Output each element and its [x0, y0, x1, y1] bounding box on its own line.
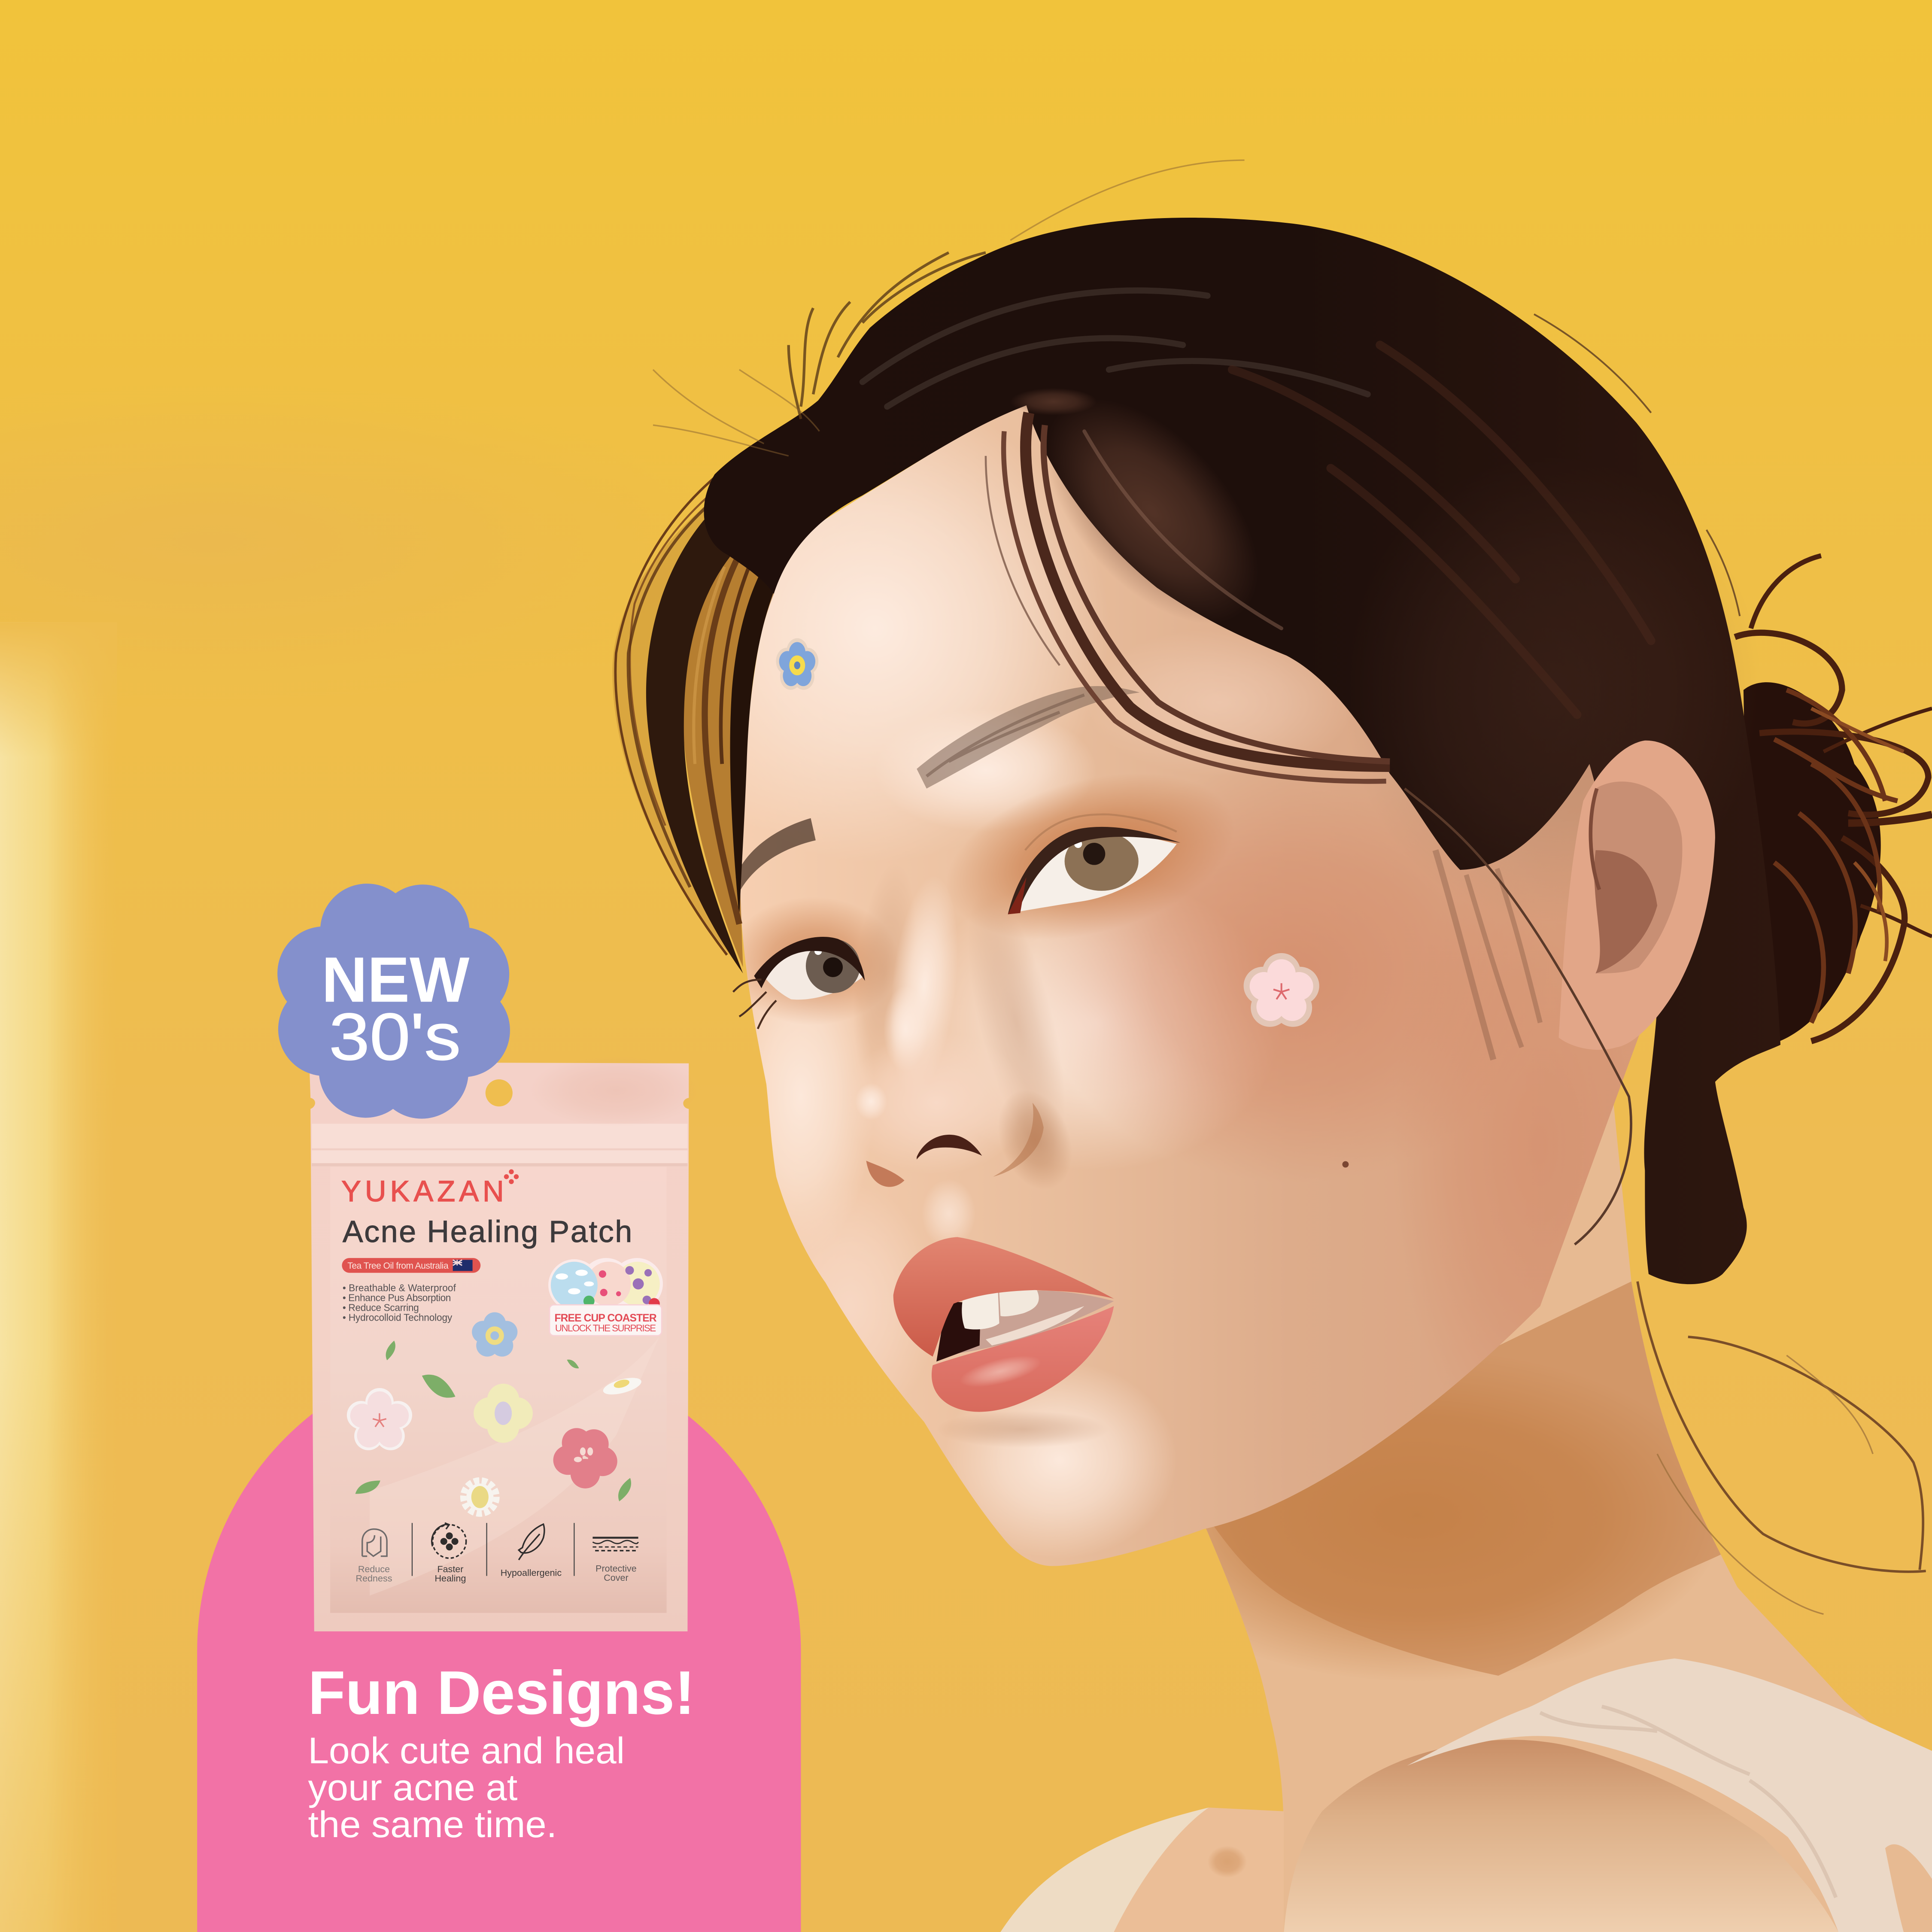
face	[740, 405, 1639, 1566]
zip seal band	[312, 1054, 702, 1166]
product name: Acne Healing Patch	[343, 1215, 632, 1249]
feature labels: Protective	[595, 1564, 637, 1574]
product pouch	[309, 1054, 702, 1631]
benefits list: • Reduce Scarring	[343, 1302, 419, 1313]
free cup coaster sticker	[548, 1258, 663, 1336]
patch: cherry blossom on cheek	[1244, 953, 1319, 1027]
tea tree pill: Tea Tree Oil from Australia	[347, 1261, 449, 1271]
feature labels: Healing	[434, 1574, 466, 1584]
clothing top straps	[1000, 1659, 1932, 1932]
feature labels: Reduce	[358, 1564, 390, 1574]
soft sideburn hair	[1435, 850, 1540, 1060]
red flower	[553, 1428, 617, 1488]
left sweep of hair	[612, 431, 813, 973]
neck	[1206, 1105, 1932, 1932]
feature labels	[356, 1564, 637, 1584]
sheen	[370, 1337, 659, 1596]
body copy: the same time.	[308, 1804, 557, 1845]
right eye	[1008, 814, 1180, 914]
green leaves	[353, 1340, 634, 1503]
slanted daisy	[601, 1375, 643, 1398]
feature labels: Redness	[356, 1574, 392, 1584]
blue flower	[472, 1312, 517, 1357]
mole	[1342, 1161, 1349, 1168]
body copy: your acne at	[308, 1767, 517, 1808]
pouch inner panel	[330, 1167, 667, 1613]
icon: protective layers	[592, 1538, 638, 1551]
badge: new 30's: NEW	[322, 944, 470, 1015]
icon: reduce redness face	[362, 1529, 387, 1556]
wisps and flyaways	[653, 160, 1926, 1614]
daisy	[463, 1480, 497, 1514]
benefits list: • Breathable & Waterproof	[343, 1282, 456, 1294]
left eye	[733, 937, 865, 1029]
nose	[866, 1103, 1044, 1187]
feature labels: Hypoallergenic	[501, 1568, 562, 1578]
white-edged blossom	[347, 1388, 412, 1450]
bangs strand bundle	[986, 413, 1390, 781]
heading: fun designs: Fun Designs!	[308, 1659, 695, 1727]
icon: faster healing	[432, 1523, 466, 1558]
benefits list: • Hydrocolloid Technology	[343, 1312, 453, 1323]
badge: new 30's: 30's	[329, 999, 461, 1074]
free cup coaster sticker: FREE CUP COASTER	[554, 1312, 657, 1324]
icon: feather	[519, 1524, 544, 1560]
tea tree pill	[342, 1258, 480, 1273]
dividers	[412, 1523, 574, 1576]
hair main mass	[704, 218, 1780, 1284]
ear	[1558, 741, 1715, 1050]
benefits list	[343, 1282, 456, 1323]
hang hole	[486, 1079, 513, 1106]
body copy	[308, 1730, 625, 1845]
pouch body	[309, 1062, 689, 1631]
body copy: Look cute and heal	[308, 1730, 625, 1771]
eyebrows	[735, 686, 1140, 892]
badge: new 30's	[277, 884, 510, 1119]
free cup coaster sticker: UNLOCK THE SURPRISE	[555, 1323, 656, 1334]
logo: YUKAZAN: YUKAZAN	[341, 1175, 504, 1208]
shoulder, chest	[1114, 1740, 1838, 1932]
feature labels: Faster	[437, 1564, 463, 1574]
benefits list: • Enhance Pus Absorption	[343, 1292, 451, 1303]
hair bun	[1735, 556, 1932, 1047]
yellow flower	[474, 1384, 533, 1443]
lips and teeth	[893, 1237, 1114, 1412]
panel: pink arch	[197, 1349, 801, 1932]
patch: blue flower on forehead	[776, 638, 818, 690]
feature labels: Cover	[604, 1573, 629, 1583]
